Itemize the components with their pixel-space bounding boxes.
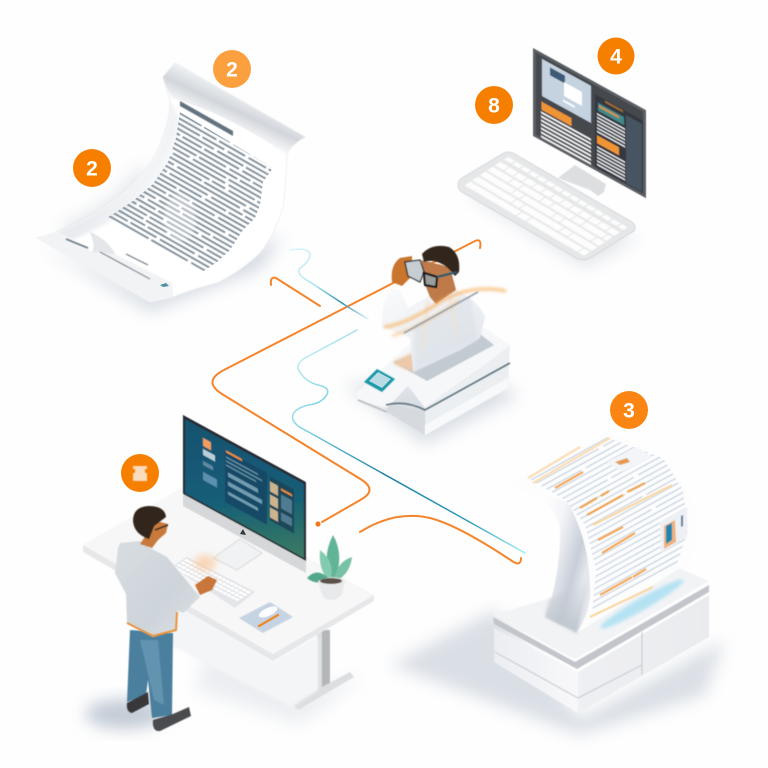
- plant: [307, 535, 352, 600]
- cabinet seams: [495, 632, 642, 698]
- keyboard keys: [468, 158, 625, 254]
- orange connector dot: [315, 521, 321, 527]
- monitor stand: [558, 165, 606, 196]
- central scanner with person: [357, 246, 510, 435]
- blue connector: lower: [293, 330, 525, 553]
- man jeans: [127, 630, 191, 731]
- badge: 8: 8: [488, 94, 500, 118]
- cabinet left face: [494, 628, 578, 713]
- badge: icon hourglass: [121, 454, 159, 492]
- inner page shading: [55, 100, 180, 240]
- desk keyboard: [172, 557, 255, 608]
- man hair: [133, 506, 166, 539]
- desk front edge: [83, 545, 374, 661]
- person hand: [392, 256, 412, 286]
- text lines: [530, 438, 688, 610]
- teal stamp: [160, 283, 169, 287]
- orange highlights: [528, 438, 672, 617]
- orange connector: desk to printout: [360, 516, 521, 563]
- badge: 2: 2: [86, 158, 98, 180]
- connector lines: [212, 240, 525, 563]
- cabinet top: [493, 563, 709, 658]
- large card image: [660, 507, 687, 553]
- transparent glass sheet: [414, 296, 478, 372]
- plant pot: [318, 577, 345, 600]
- shirt hem: [127, 612, 177, 636]
- document text lines: [108, 112, 273, 272]
- printing station: [492, 436, 710, 712]
- workstation: upper monitor and keyboard: [458, 48, 646, 260]
- plant back leaf: [327, 535, 339, 582]
- monitor screen: [533, 48, 646, 198]
- paper underside lower shade: [545, 578, 590, 633]
- plant left leaf: [307, 572, 330, 583]
- man hand: [195, 576, 217, 595]
- man shirt: [115, 541, 200, 637]
- pen: [259, 615, 278, 626]
- keyboard glow: [194, 555, 216, 571]
- scanner seam: [386, 363, 510, 410]
- badge: 8: [475, 86, 513, 124]
- desk scene: [83, 415, 374, 731]
- orange light swoosh lower: [392, 300, 460, 336]
- scanner screen: [364, 369, 395, 392]
- badge: 3: [610, 391, 648, 429]
- scanner bed recess: [393, 334, 494, 381]
- man left shoe: [127, 692, 149, 713]
- person hair: [422, 246, 459, 276]
- floor shadows: [40, 165, 725, 735]
- desk top: [83, 487, 374, 654]
- faded centre of text: [164, 194, 196, 242]
- scanning bar: [404, 292, 478, 333]
- scanner left base shadow: [358, 400, 387, 412]
- coat lapel detail: [422, 295, 456, 350]
- desk monitor: [183, 415, 306, 573]
- hourglass glyph: [133, 466, 147, 481]
- document title bar: [180, 101, 233, 136]
- cabinet right face: [578, 595, 709, 713]
- person face and neck: [421, 260, 456, 304]
- bottom curl: [37, 232, 173, 302]
- blue connector: upper: [290, 249, 368, 319]
- monitor stand: [213, 539, 262, 570]
- plant soil: [320, 578, 342, 584]
- orange light swoosh: [384, 289, 506, 327]
- mouse pad: [239, 602, 293, 633]
- viewer device: [405, 260, 424, 282]
- top roll: [163, 63, 305, 155]
- mouse: [257, 604, 279, 620]
- scanner screen display: [369, 372, 391, 388]
- scanner base strip: [425, 378, 508, 435]
- keyboard body: [458, 152, 635, 260]
- monitor logo: [240, 529, 246, 535]
- man glasses: [155, 525, 168, 530]
- paper sheet: [502, 433, 697, 633]
- orange connector: short hook: [271, 278, 320, 306]
- glasses: [424, 272, 457, 287]
- scanner skin reflection: [393, 352, 414, 372]
- desk leg: [292, 630, 354, 710]
- scanner right face: [425, 345, 510, 435]
- small card image: [607, 447, 652, 472]
- badge: 2 light: [213, 50, 251, 88]
- desk underside shading: [170, 600, 318, 707]
- badge: 3: 3: [623, 400, 635, 422]
- orange connector: glasses to desk monitor: [212, 240, 480, 522]
- man right shoe: [153, 707, 191, 731]
- badge: 4: [598, 38, 634, 74]
- badge: 2: [73, 149, 111, 187]
- blue under-glow: [597, 575, 687, 633]
- plant right leaf: [334, 557, 352, 582]
- signature lines: [66, 239, 150, 279]
- badge: 4: 4: [610, 46, 622, 68]
- person coat: [382, 288, 485, 372]
- desk keyboard keys: [174, 560, 251, 601]
- cabinet top rim: [493, 585, 709, 669]
- man neck and face: [140, 520, 168, 548]
- paper underside: [502, 485, 590, 633]
- plant mid leaf: [320, 550, 332, 582]
- curl fold: [90, 232, 115, 254]
- badge: 2 light: 2: [226, 58, 238, 82]
- document illustration: curled paper: [36, 62, 306, 302]
- scanner top: [357, 328, 510, 408]
- scanner lower tray: [387, 404, 425, 435]
- paper sheet: [37, 63, 305, 302]
